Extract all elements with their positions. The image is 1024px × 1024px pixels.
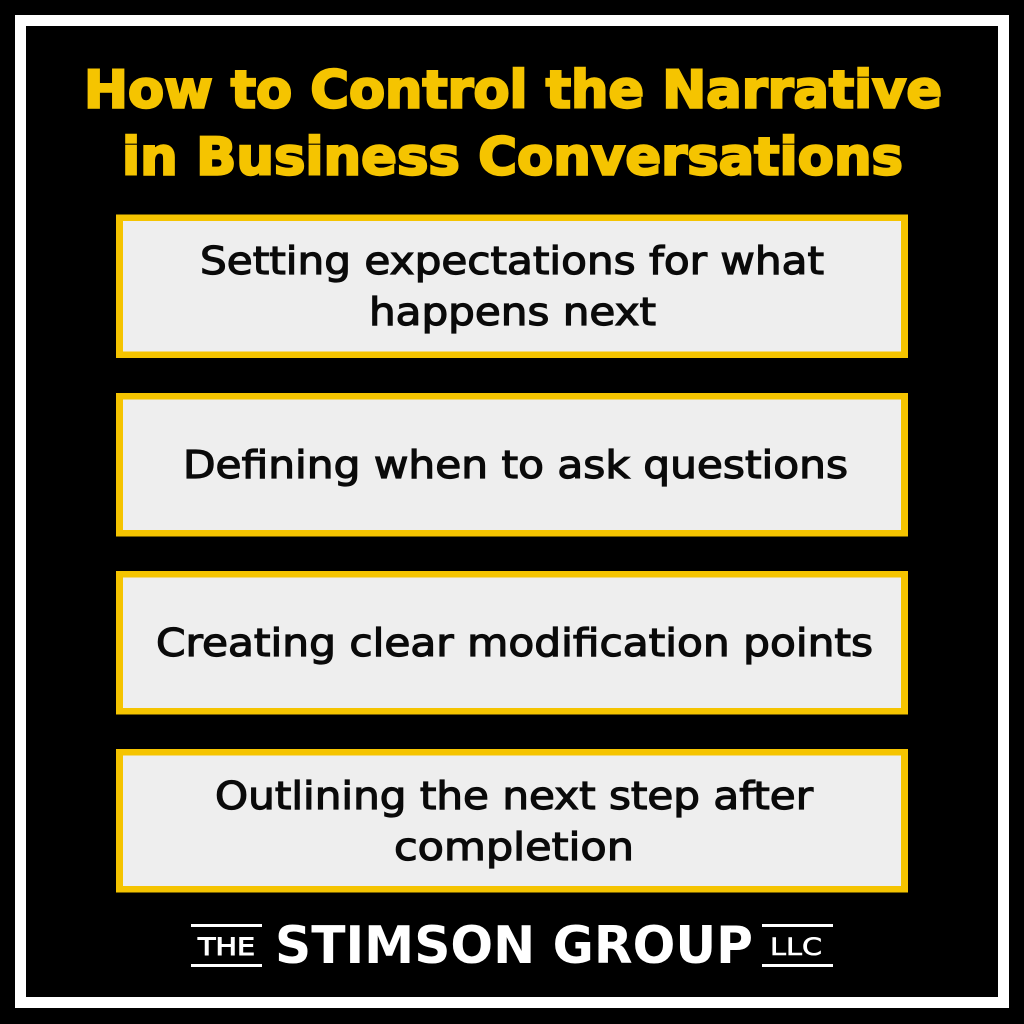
panel: setting expectations: happens next (369, 290, 656, 334)
panel: modification points: Creating clear modification points (156, 621, 873, 665)
panel: defining questions: Defining when to ask questions (183, 443, 848, 487)
panel: outlining next step: completion (394, 825, 634, 869)
logo: The Stimson Group LLC: LLC (770, 933, 822, 961)
panel: modification points (116, 571, 908, 714)
panel: outlining next step: Outlining the next step after (215, 774, 813, 818)
panel: setting expectations: Setting expectations for what (200, 239, 824, 283)
panel: outlining next step (116, 749, 908, 892)
panel: setting expectations (116, 214, 908, 358)
panel: defining questions (116, 393, 908, 536)
logo: The Stimson Group LLC: STIMSON GROUP (275, 916, 753, 976)
title (84, 60, 942, 188)
title: in Business Conversations (122, 128, 903, 188)
title: How to Control the Narrative (84, 60, 942, 120)
logo: The Stimson Group LLC: THE (197, 933, 255, 961)
